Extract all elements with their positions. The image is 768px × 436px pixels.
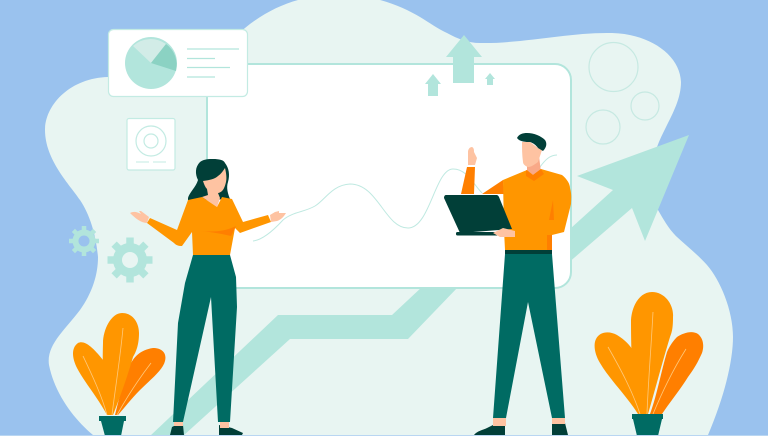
sweater <box>147 197 271 255</box>
small gear <box>69 226 99 256</box>
laptop <box>444 195 512 236</box>
up arrows <box>425 35 495 96</box>
face and neck <box>202 168 226 207</box>
small up arrow <box>485 73 495 85</box>
left up arrow <box>425 74 441 96</box>
left plant <box>73 313 165 436</box>
neck <box>527 156 541 178</box>
shoes <box>170 425 243 435</box>
man's hand <box>493 228 515 237</box>
arrow head <box>560 135 689 270</box>
belt <box>505 250 552 254</box>
ankles <box>174 421 229 428</box>
trousers <box>173 255 237 422</box>
raised hand <box>468 147 477 165</box>
left pot <box>99 416 126 436</box>
woman <box>130 159 286 435</box>
growth arrow shaft <box>150 286 459 436</box>
target card <box>127 118 175 170</box>
man <box>444 133 571 435</box>
trousers <box>493 254 565 418</box>
face <box>522 142 542 167</box>
right pot <box>632 414 663 436</box>
large circle <box>589 42 638 92</box>
small circle <box>586 110 620 144</box>
ankles <box>493 418 565 426</box>
far arm <box>461 167 504 194</box>
medium circle <box>631 92 659 120</box>
man's hair <box>517 133 546 151</box>
sweater <box>503 169 571 250</box>
right plant <box>595 292 703 436</box>
whiteboard <box>207 64 571 288</box>
large gear <box>108 238 152 282</box>
legend lines <box>187 49 239 77</box>
hair <box>188 159 230 200</box>
sweater fold <box>200 226 236 236</box>
shoes <box>474 423 568 435</box>
bottom strip <box>0 435 768 436</box>
large up arrow <box>446 35 482 83</box>
pie chart <box>125 37 177 89</box>
woman's hands <box>130 211 286 223</box>
body folds <box>547 200 554 250</box>
circles <box>586 42 659 144</box>
trend line <box>253 155 557 241</box>
collar <box>526 169 544 181</box>
pie chart card <box>108 30 248 96</box>
